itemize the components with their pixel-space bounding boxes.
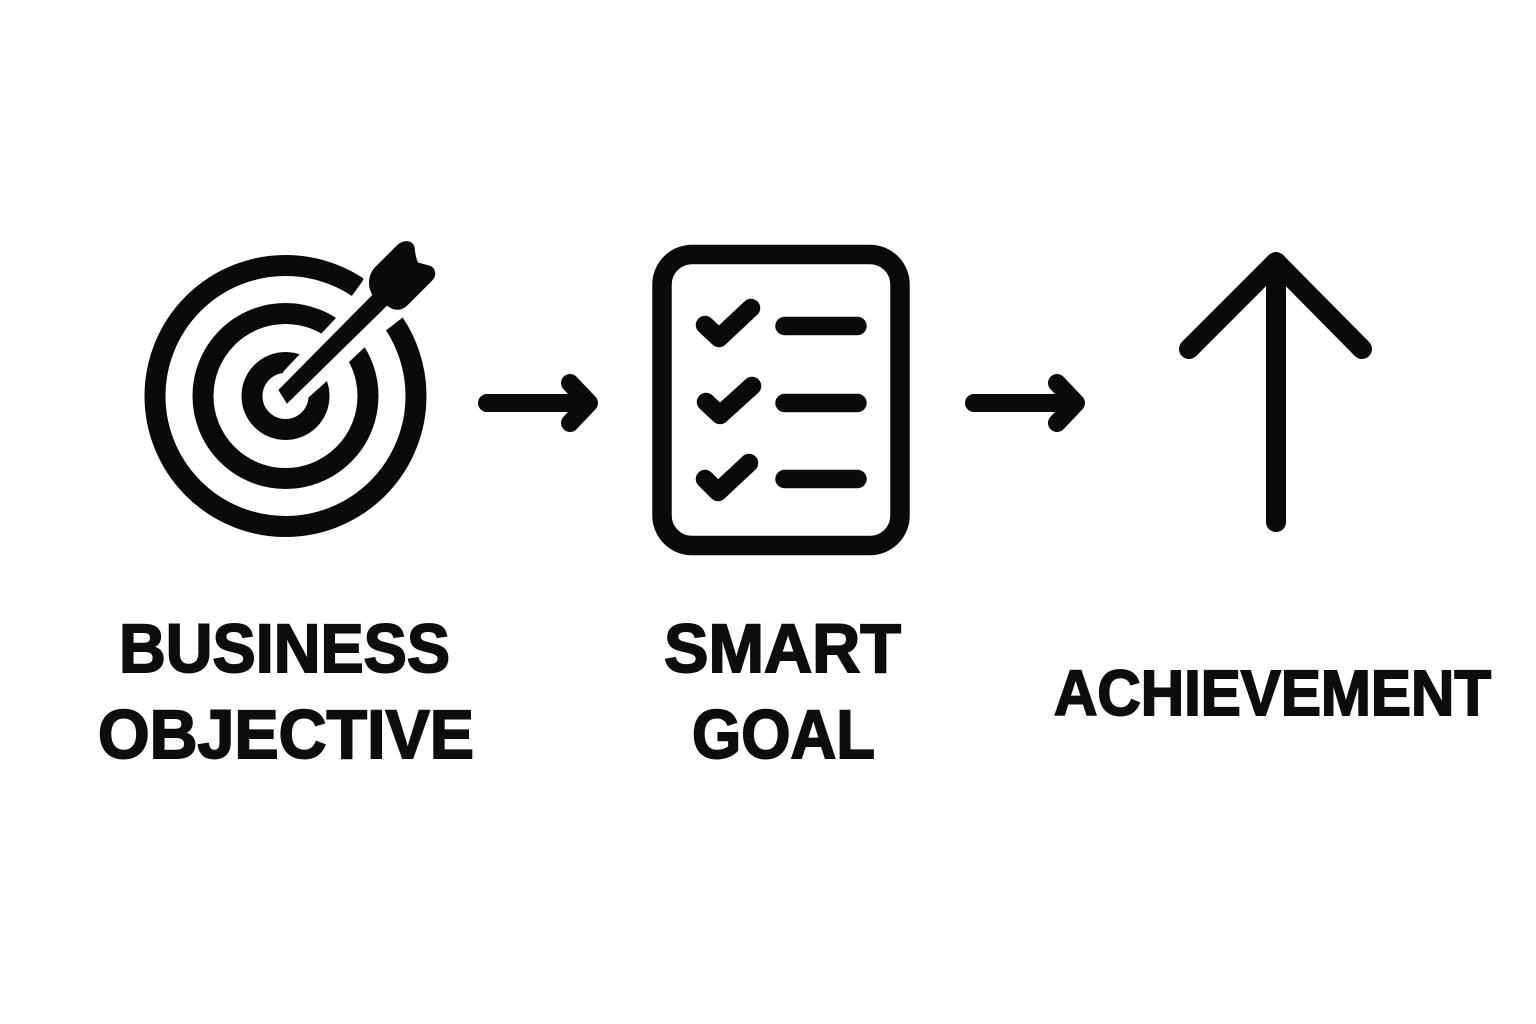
- arrow: objective to goal: [487, 383, 589, 423]
- label: business objective: BUSINESS: [119, 610, 450, 687]
- arrow: goal to achievement: [974, 383, 1076, 423]
- icon: upward arrow: [1189, 262, 1362, 522]
- label: achievement: ACHIEVEMENT: [1054, 657, 1491, 729]
- icon: target with arrow: [155, 242, 435, 526]
- checklist row 2: [706, 386, 858, 415]
- label: business objective: [98, 610, 474, 773]
- label: smart goal: [664, 610, 901, 773]
- label: smart goal: GOAL: [692, 696, 875, 773]
- icon: checklist: [662, 254, 900, 546]
- checklist row 1: [705, 308, 858, 338]
- label: business objective: OBJECTIVE: [98, 696, 474, 773]
- checklist row 3: [705, 463, 858, 492]
- label: smart goal: SMART: [664, 610, 901, 687]
